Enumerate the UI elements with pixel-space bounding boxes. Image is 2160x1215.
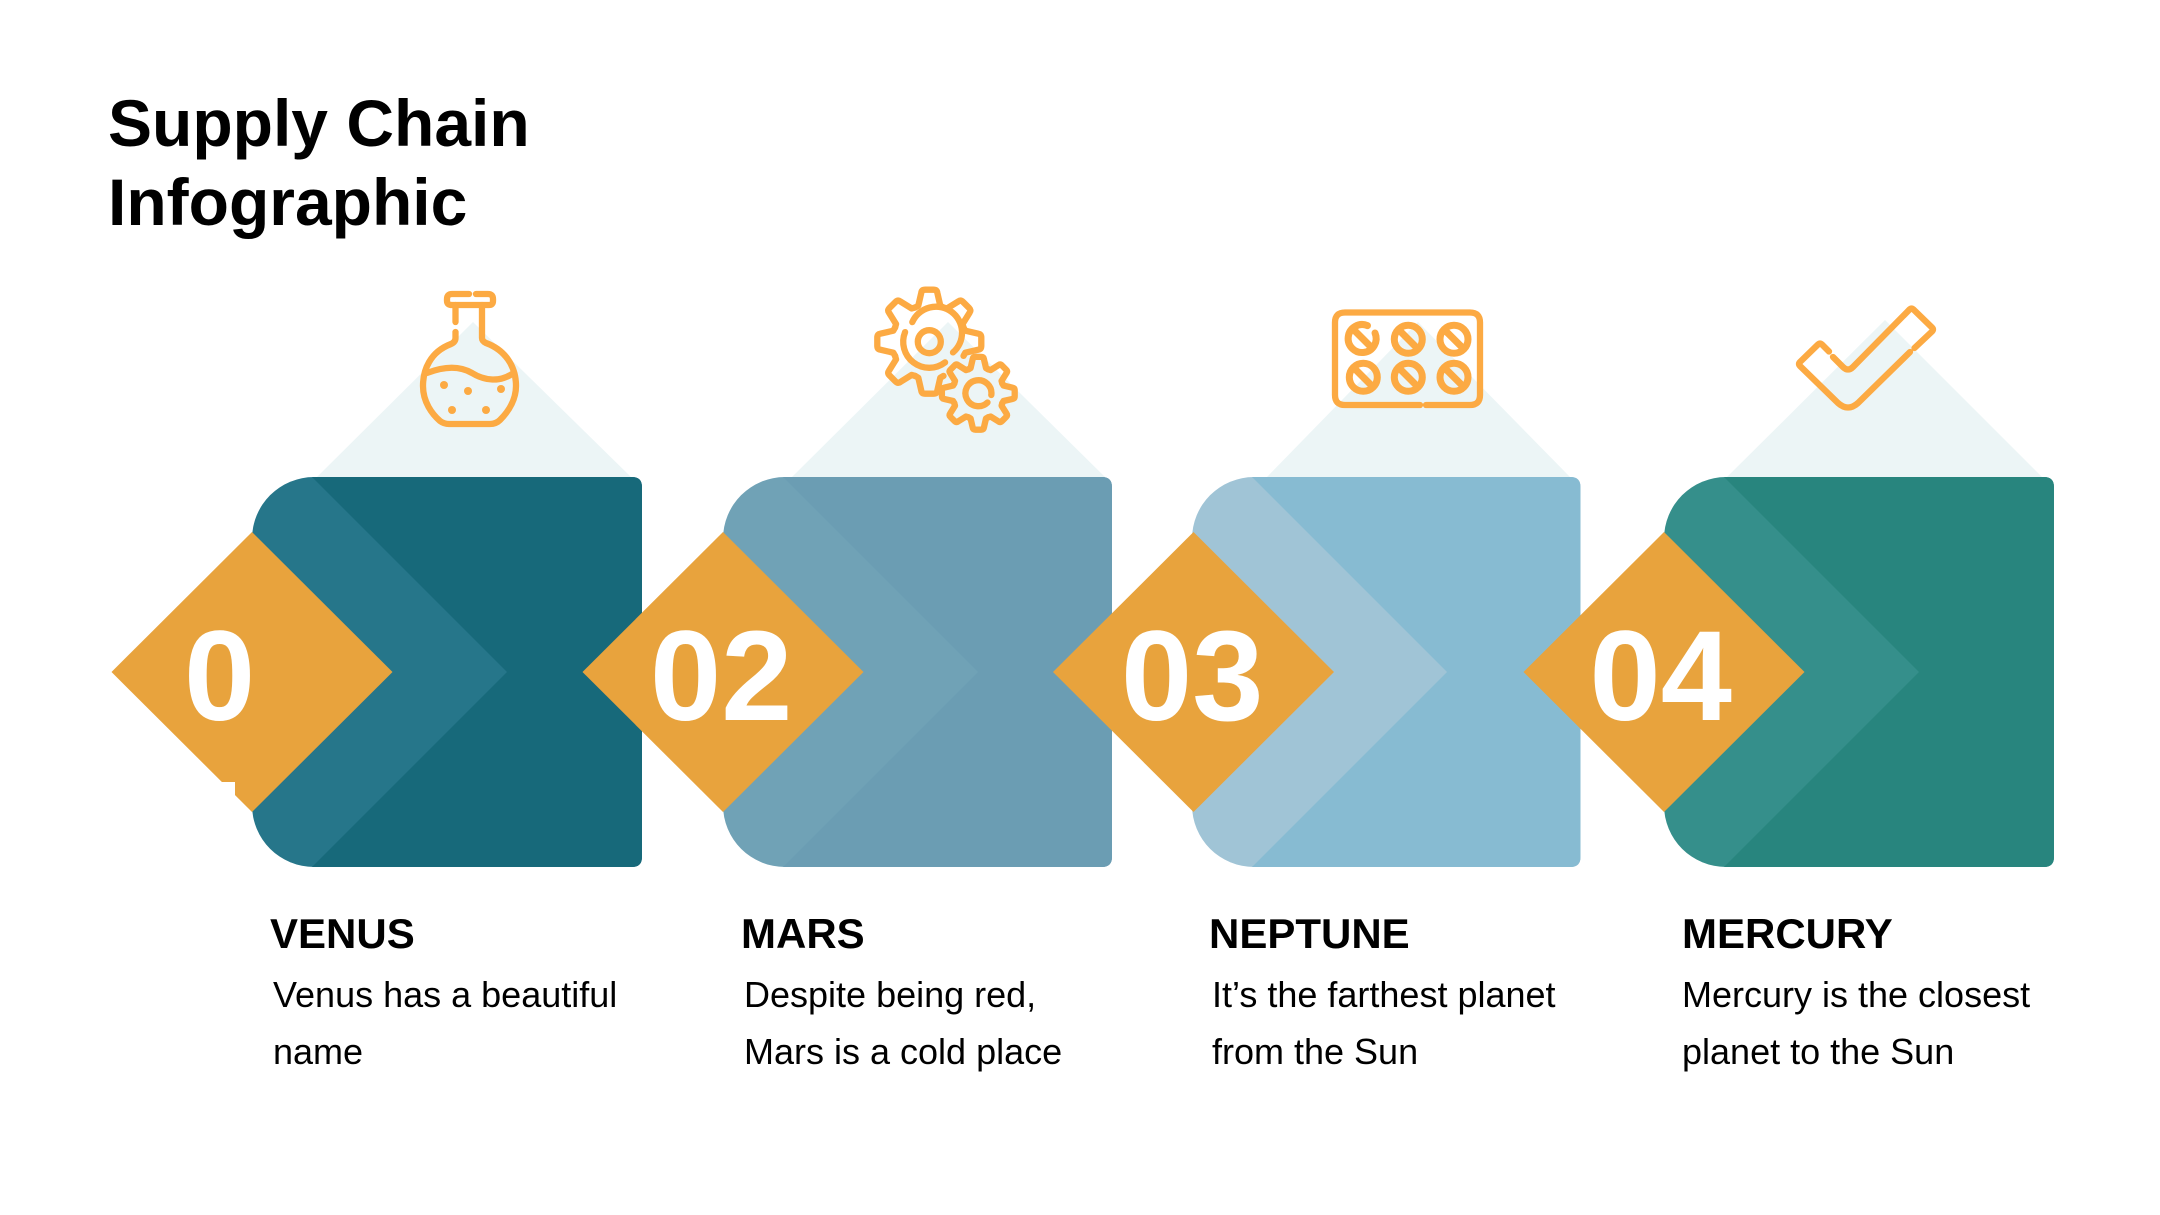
label: Mars: MARS (741, 910, 865, 957)
diamond: 01 (112, 532, 392, 812)
diamond: 02: 02 (650, 605, 792, 748)
icon: check mark (1799, 308, 1933, 408)
diamond: 03: 03 (1121, 605, 1263, 748)
panel: Neptune step (1053, 312, 1580, 1072)
light triangle: Neptune (1267, 322, 1570, 477)
label: Mars: Mars is a cold place (744, 1031, 1062, 1072)
card: Venus (252, 477, 642, 867)
card: Neptune (1192, 477, 1580, 867)
label: Venus (270, 910, 617, 1072)
card: Mars (723, 477, 1112, 867)
label: Neptune: It’s the farthest planet (1212, 974, 1556, 1015)
diamond: 03 (1053, 532, 1334, 812)
diamond: 04 (1524, 532, 1804, 812)
label: Mercury: planet to the Sun (1682, 1031, 1954, 1072)
label: Mercury: Mercury is the closest (1682, 974, 2030, 1015)
label: Neptune: from the Sun (1212, 1031, 1418, 1072)
icon: gears (877, 290, 1015, 430)
label: Venus: Venus has a beautiful (273, 974, 617, 1015)
label: Mercury: MERCURY (1682, 910, 1893, 957)
icon: pill blister (1335, 312, 1480, 405)
label: Neptune: NEPTUNE (1209, 910, 1410, 957)
diamond: 01: 0 (184, 605, 255, 748)
label: Venus: VENUS (270, 910, 415, 957)
icon: flask (423, 294, 516, 424)
label: Neptune (1209, 910, 1556, 1072)
label: Mercury (1682, 910, 2030, 1072)
diamond: 02 (582, 532, 864, 812)
panel: Mercury step (1524, 308, 2054, 1072)
title: Infographic (108, 165, 467, 239)
title (108, 86, 530, 239)
card: Mercury (1664, 477, 2054, 867)
diamond: 04: 04 (1590, 605, 1732, 748)
light triangle: Mercury (1727, 320, 2042, 477)
light triangle: Venus (317, 322, 631, 477)
panel: Mars step (582, 290, 1112, 1072)
label: Venus: name (273, 1031, 363, 1072)
title: Supply Chain (108, 86, 530, 160)
light triangle: Mars (792, 322, 1105, 477)
panel: Venus step (112, 294, 642, 1072)
label: Mars (741, 910, 1062, 1072)
label: Mars: Despite being red, (744, 974, 1036, 1015)
